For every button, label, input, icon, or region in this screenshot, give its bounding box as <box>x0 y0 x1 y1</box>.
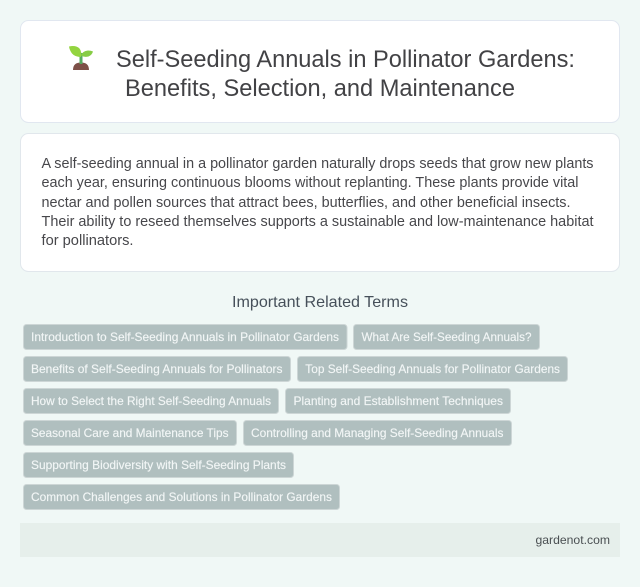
tag: challenges <box>24 484 340 510</box>
text block: description: Their ability to reseed themselves supports a sustainable and low-maintenance habitat <box>42 214 593 230</box>
title: Self-Seeding Annuals in Pollinator Gardens: <box>116 46 575 73</box>
tag: what are: What Are Self-Seeding Annuals? <box>362 330 532 344</box>
panel: description card <box>20 134 620 272</box>
tag: what are <box>354 324 540 350</box>
footer <box>20 523 620 557</box>
tag: top annuals <box>298 356 568 382</box>
text block: description: for pollinators. <box>42 233 134 249</box>
title: Benefits, Selection, and Maintenance <box>125 75 515 102</box>
tag: biodiversity <box>24 452 294 478</box>
text block: description <box>42 156 594 249</box>
title <box>116 46 575 102</box>
heading: important related terms: Important Related Terms <box>232 294 408 311</box>
tag: benefits: Benefits of Self-Seeding Annuals for Pollinators <box>31 362 282 376</box>
tag: how to select <box>24 388 278 414</box>
text block: description: nectar and pollen sources that attract bees, butterflies, and other beneficial insects. <box>42 195 570 211</box>
tag: introduction <box>24 324 347 350</box>
tag: planting <box>286 388 510 414</box>
tag: controlling: Controlling and Managing Self-Seeding Annuals <box>251 426 504 440</box>
tag: controlling <box>244 420 512 446</box>
tag: how to select: How to Select the Right Self-Seeding Annuals <box>31 394 271 408</box>
tag: seasonal care <box>24 420 236 446</box>
panel: header card <box>20 20 620 122</box>
tag: introduction: Introduction to Self-Seeding Annuals in Pollinator Gardens <box>31 330 339 344</box>
tag: top annuals: Top Self-Seeding Annuals for Pollinator Gardens <box>305 362 560 376</box>
tag: biodiversity: Supporting Biodiversity with Self-Seeding Plants <box>31 458 286 472</box>
tag: benefits <box>24 356 290 382</box>
tag list <box>24 324 568 510</box>
text block: description: each year, ensuring continuous blooms without replanting. These plants provide vital <box>42 175 578 191</box>
tag: challenges: Common Challenges and Solutions in Pollinator Gardens <box>31 490 332 504</box>
footer: gardenot.com <box>536 533 610 547</box>
text block: description: A self-seeding annual in a pollinator garden naturally drops seeds that grow new plants <box>42 156 594 172</box>
tag: planting: Planting and Establishment Techniques <box>294 394 503 408</box>
tag: seasonal care: Seasonal Care and Maintenance Tips <box>31 426 228 440</box>
icon: sprout <box>69 46 93 70</box>
